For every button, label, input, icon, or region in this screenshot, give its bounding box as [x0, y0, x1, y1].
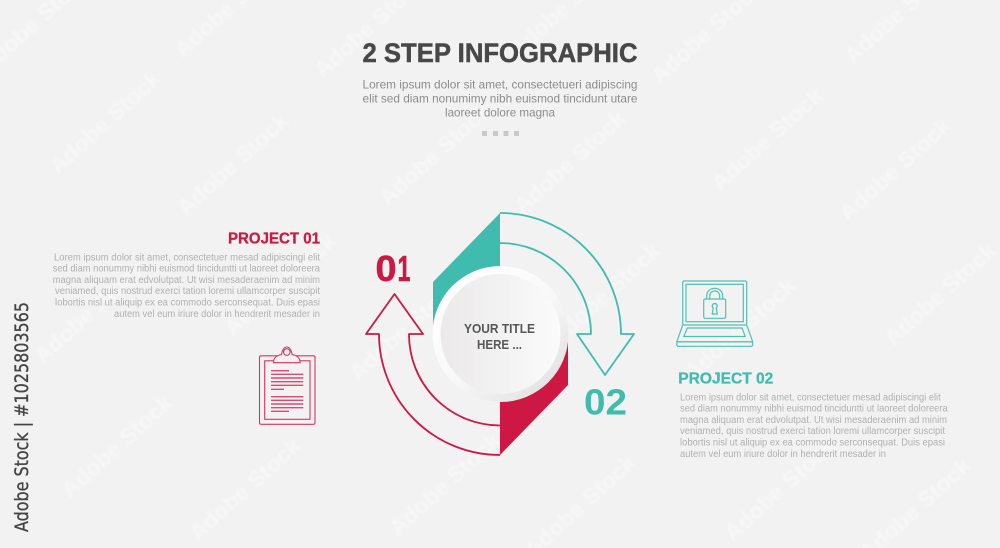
arrow: teal outline clockwise [500, 213, 634, 375]
project 01 heading: PROJECT 01 [228, 230, 320, 248]
step number 01 [376, 248, 410, 289]
step number 01: 1 [398, 248, 410, 289]
project 01 body text: magna aliquam erat edvolutpat. Ut wisi mesaderaenim ad minim [53, 275, 320, 286]
project 01 body text: autem vel eum iriure dolor in hendrerit mesader in [114, 309, 320, 320]
centre label: YOUR TITLE [464, 322, 535, 336]
watermark pattern: Adobe Stock [374, 97, 496, 211]
step number 02: 02 [584, 382, 627, 422]
subtitle [362, 78, 638, 120]
project 02 body text: sed diam nonummy nibhi euismod tinciduntti ut laoreet doloreera [680, 404, 948, 415]
subtitle: Lorem ipsum dolor sit amet, consectetueri adipiscing [362, 78, 638, 92]
watermark pattern: Adobe Stock [384, 427, 506, 541]
watermark pattern: Adobe Stock [219, 227, 341, 341]
watermark pattern: Adobe Stock [172, 107, 294, 221]
centre label: HERE ... [477, 338, 522, 352]
centre circle [432, 266, 568, 402]
teal block [433, 213, 500, 334]
watermark pattern: Adobe Stock [706, 82, 828, 196]
project 02 body text: magna aliquam erat edvolutpat. Ut wisi mesaderaenim ad minim [680, 415, 947, 426]
icon: clipboard [260, 347, 315, 424]
project 02 heading: PROJECT 02 [678, 370, 773, 388]
subtitle: elit sed diam nonumimy nibh euismod tincidunt utare [362, 92, 638, 106]
panel: project 02 [678, 370, 948, 460]
arrow: red outline clockwise [366, 294, 500, 455]
title divider dots [482, 131, 519, 136]
centre label [464, 322, 535, 352]
panel: central cycle diagram [366, 213, 634, 455]
subtitle: laoreet dolore magna [445, 106, 555, 120]
title: 2 STEP INFOGRAPHIC [362, 38, 638, 68]
watermark pattern: Adobe Stock [544, 237, 666, 351]
project 01 body text: lobortis nisl ut aliquip ex ea commodo serconsequat. Duis epasi [55, 298, 320, 308]
project 02 body text [680, 392, 948, 460]
project 01 body text [53, 252, 321, 320]
watermark pattern: Adobe Stock [509, 105, 631, 219]
watermark pattern: Adobe Stock [44, 65, 166, 179]
project 02 body text: lobortis nisl ut aliquip ex ea commodo serconsequat. Duis epasi [680, 438, 945, 448]
step number 01: 0 [376, 248, 396, 289]
stock id label: Adobe Stock | #1025803565 [11, 302, 33, 532]
project 01 body text: veniamed, quis nostrud exerci tation loremi ullamcorper suscipit [55, 286, 320, 297]
watermark pattern: Adobe Stock [834, 112, 956, 226]
watermark pattern: Adobe Stock [56, 389, 178, 503]
watermark pattern: Adobe Stock [184, 432, 306, 546]
watermark pattern: Adobe Stock [29, 255, 151, 369]
project 01 body text: Lorem ipsum dolor sit amet, consectetuer mesad adipiscingi elit [54, 252, 320, 263]
project 02 body text: autem vel eum iriure dolor in hendrerit mesader in [680, 449, 886, 460]
project 02 body text: veniamed, quis nostrud exerci tation loremi ullamcorper suscipit [680, 426, 945, 437]
watermark pattern: Adobe Stock [719, 432, 841, 546]
watermark pattern: Adobe Stock [679, 272, 801, 386]
red block [500, 334, 568, 455]
panel: project 01 [53, 230, 321, 320]
watermark pattern: Adobe Stock [344, 272, 466, 386]
project 02 body text: Lorem ipsum dolor sit amet, consectetuer mesad adipiscingi elit [680, 392, 941, 403]
icon: laptop with padlock [677, 281, 753, 346]
watermark pattern: Adobe Stock [879, 237, 1000, 351]
project 01 body text: sed diam nonummy nibhi euismod tinciduntti ut laoreet doloreera [53, 264, 321, 275]
